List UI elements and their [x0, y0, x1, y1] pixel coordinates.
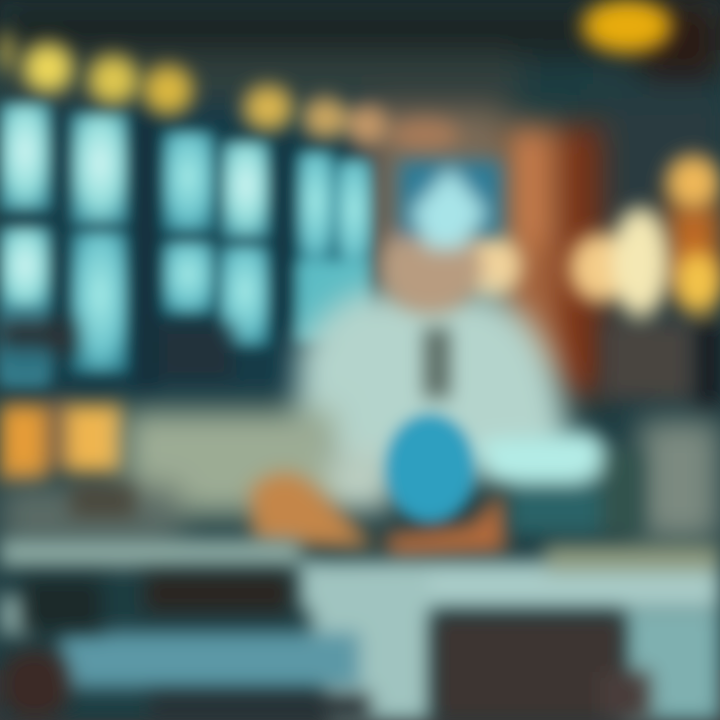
counter: warm objects [70, 472, 505, 556]
orange wood column [500, 125, 720, 395]
person: lab coat [296, 288, 570, 480]
teal box on right [480, 432, 642, 535]
ceiling lights [0, 0, 719, 208]
person: head and cap [378, 160, 502, 314]
person: tie [424, 328, 450, 398]
right side glowing lamps [458, 208, 720, 410]
counter and table items [0, 410, 720, 545]
blue round object [385, 414, 475, 522]
window mullions and dark lower frames [0, 110, 290, 395]
orange lower wall glow [0, 400, 122, 480]
foreground: light table surfaces [0, 540, 720, 720]
foreground: dark chairs and shadows [0, 574, 650, 720]
background: dark ceiling and wall [0, 0, 720, 400]
windows: glowing cyan panels [0, 104, 372, 385]
